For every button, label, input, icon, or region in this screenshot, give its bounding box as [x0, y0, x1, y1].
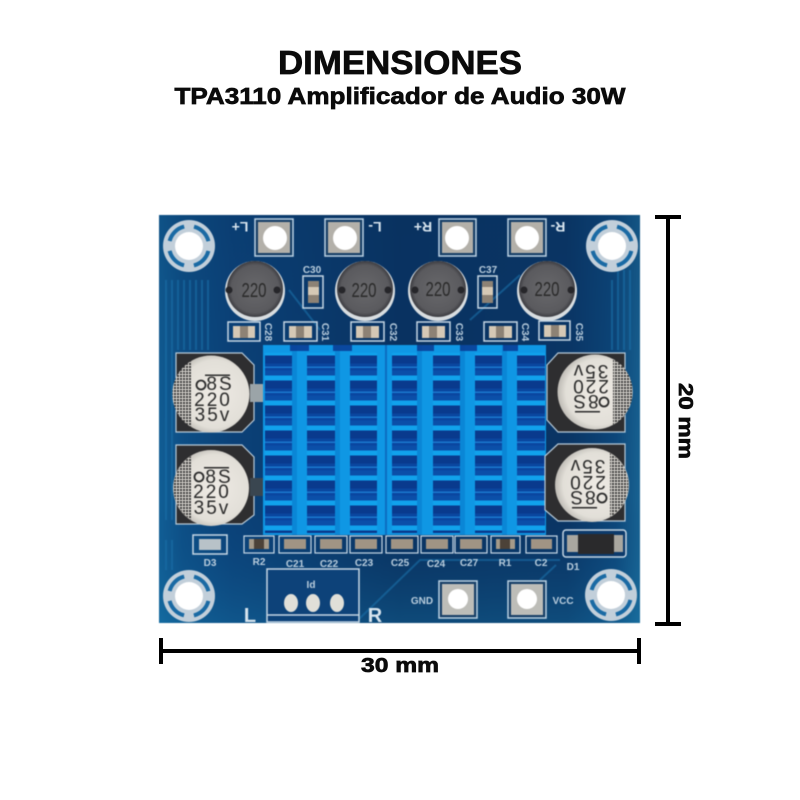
audio jumper header: L — [244, 605, 256, 627]
component labels: C25 — [391, 558, 410, 569]
component labels: C2 — [535, 558, 548, 569]
component labels: R1 — [499, 558, 512, 569]
width label: 30 mm — [361, 655, 439, 677]
component labels: C21 — [286, 559, 305, 570]
inductors: 220 — [352, 280, 376, 302]
electrolytic capacitors: 35v — [569, 455, 605, 476]
small capacitor row: C28 — [262, 323, 273, 342]
electrolytic capacitors: 35v — [194, 498, 230, 519]
audio jumper header — [244, 569, 383, 627]
electrolytic capacitors: 8S — [205, 467, 233, 488]
small capacitor row: C33 — [453, 323, 464, 342]
component labels: R2 — [253, 557, 266, 568]
dimension arrow: width — [159, 638, 641, 664]
output pad labels: R- — [550, 219, 565, 235]
electrolytic capacitors: 8S — [206, 374, 234, 395]
output pad labels — [232, 219, 565, 235]
capacitors C30 and C37: C30 — [303, 265, 322, 276]
small capacitor row: C31 — [319, 323, 330, 342]
small capacitor row: C32 — [387, 323, 398, 342]
capacitors C30 and C37: C37 — [479, 265, 498, 276]
electrolytic capacitors: 35v — [195, 405, 231, 426]
height label: 20 mm — [674, 383, 696, 459]
small capacitor row: C34 — [519, 323, 530, 342]
component labels — [204, 557, 580, 573]
heat sink — [263, 345, 546, 535]
dimension arrow: height — [655, 215, 681, 626]
inductors: 220 — [534, 279, 560, 301]
power pads: VCC — [552, 596, 574, 607]
electrolytic capacitors: 35v — [572, 360, 608, 381]
output pad labels: L+ — [232, 219, 248, 235]
power pads — [411, 581, 574, 618]
capacitors C30 and C37 — [303, 265, 498, 308]
amplifier circuit board — [159, 215, 640, 627]
output pad labels: L- — [368, 219, 382, 235]
inductors: 220 — [242, 280, 266, 302]
electrolytic capacitors: 220 — [571, 375, 609, 396]
electrolytic capacitors: 220 — [568, 471, 606, 492]
inductors: 220 — [426, 279, 450, 301]
component labels: C24 — [427, 559, 446, 570]
electrolytic capacitors: 220 — [193, 482, 231, 503]
output pad labels: R+ — [414, 219, 432, 235]
inductors — [225, 261, 577, 321]
component labels: D1 — [567, 562, 580, 573]
electrolytic capacitors: 8S — [568, 486, 596, 507]
power pads: GND — [411, 596, 433, 607]
small capacitor row: C35 — [573, 323, 584, 342]
component labels: D3 — [204, 558, 217, 569]
output pads — [255, 219, 546, 256]
small capacitor row — [228, 321, 584, 342]
electrolytic capacitors — [172, 353, 633, 526]
diode D1 — [563, 530, 626, 557]
component labels: C27 — [460, 558, 479, 569]
component labels: C22 — [320, 559, 339, 570]
bottom row components — [193, 535, 557, 554]
audio jumper header: R — [368, 605, 383, 627]
component labels: C23 — [355, 558, 374, 569]
title: DIMENSIONES — [278, 44, 522, 81]
subtitle: TPA3110 Amplificador de Audio 30W — [174, 83, 626, 109]
electrolytic capacitors: 8S — [571, 390, 599, 411]
mounting holes — [163, 220, 638, 622]
audio jumper header: Id — [307, 580, 315, 591]
electrolytic capacitors: 220 — [194, 390, 232, 411]
